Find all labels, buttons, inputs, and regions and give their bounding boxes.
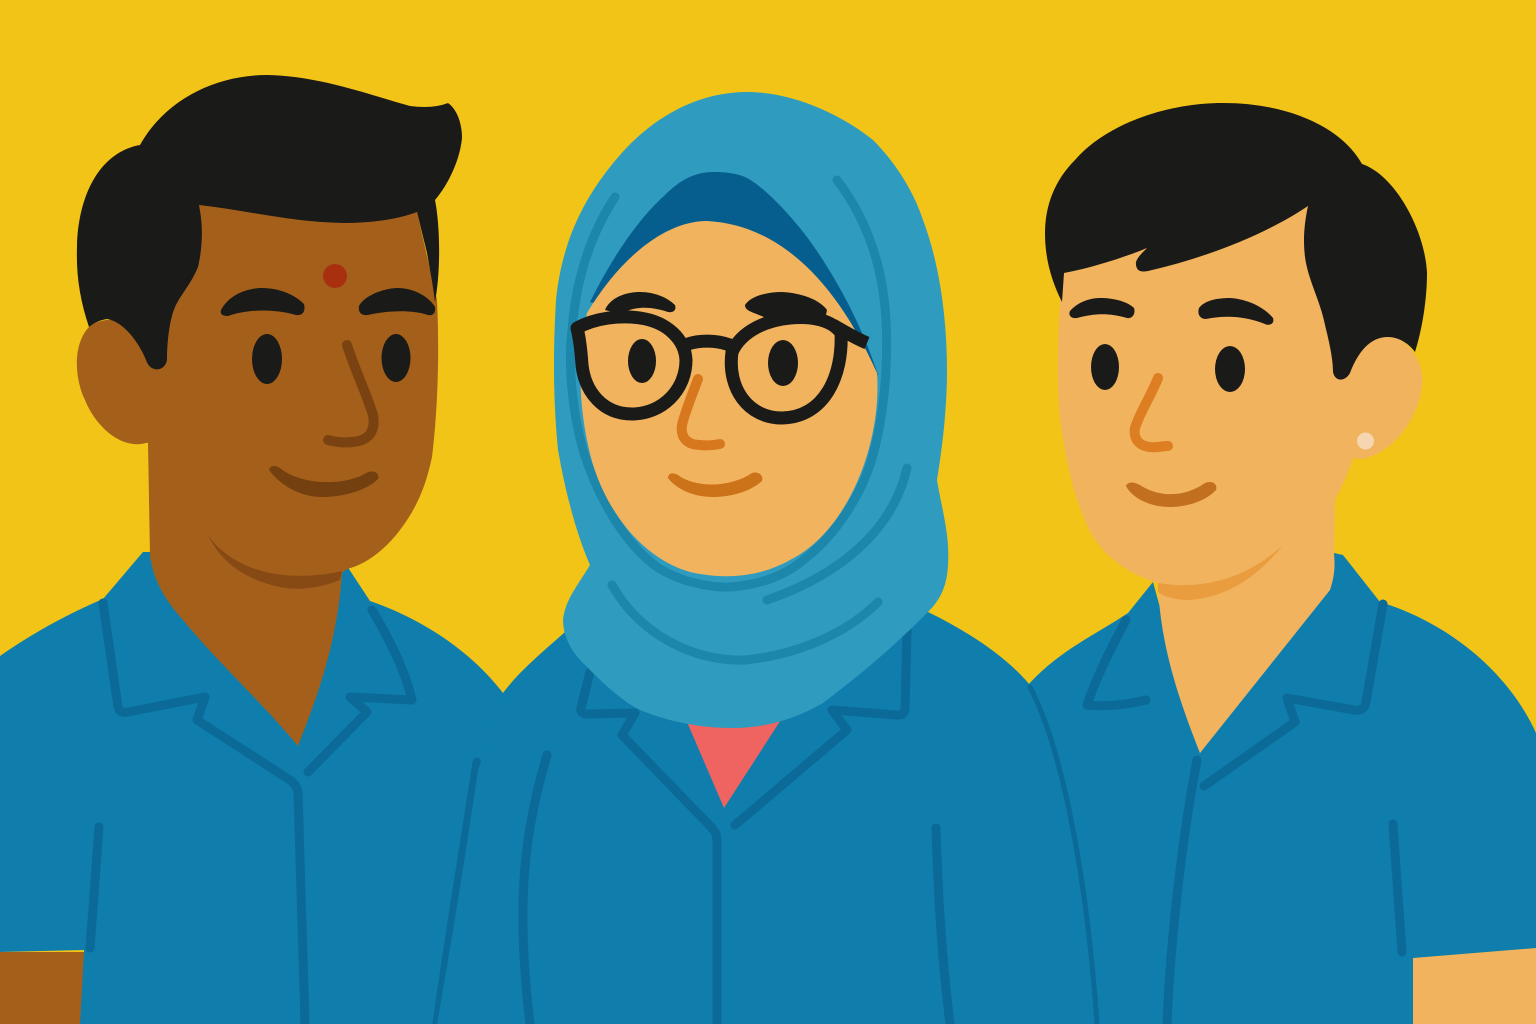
woman hijab inner band xyxy=(590,172,878,375)
woman hijab fold lines xyxy=(570,180,907,660)
woman smile xyxy=(668,472,762,497)
left man arm xyxy=(0,952,84,1024)
right man face, neck and ear xyxy=(1058,200,1422,753)
left man bindi xyxy=(323,264,347,288)
left man jaw crease xyxy=(208,535,342,589)
figure: left man xyxy=(0,75,540,1024)
woman shirt xyxy=(437,612,1097,1024)
left man eyes xyxy=(252,334,410,384)
left man shirt xyxy=(0,552,540,1024)
left man nose xyxy=(328,345,374,442)
right man hair xyxy=(1045,103,1427,380)
woman nose xyxy=(682,379,720,445)
left man ear xyxy=(77,320,170,444)
left man shirt lines xyxy=(90,603,477,1024)
woman eyebrows xyxy=(605,292,827,320)
right man nose xyxy=(1135,378,1168,447)
right man shirt xyxy=(1028,553,1536,1024)
right man smile xyxy=(1126,482,1216,507)
woman pink undershirt xyxy=(684,712,786,808)
right man eyes xyxy=(1091,344,1245,392)
right man arm xyxy=(1413,948,1536,1024)
right man shirt lines xyxy=(1087,604,1402,1024)
left man neck and face xyxy=(148,205,438,746)
woman shirt lines xyxy=(523,630,950,1024)
woman hijab xyxy=(554,92,948,728)
right man earring xyxy=(1357,432,1374,450)
woman shirt outline right xyxy=(1030,687,1097,1024)
right man jaw crease xyxy=(1158,545,1283,600)
right man eyebrows xyxy=(1069,298,1273,325)
left man eyebrows xyxy=(221,288,435,316)
woman glasses xyxy=(577,317,867,418)
figure: right man xyxy=(1028,103,1536,1024)
woman face xyxy=(580,221,878,576)
figure: center woman xyxy=(437,92,1097,1024)
left man hair xyxy=(77,75,462,369)
left man smile xyxy=(269,466,378,497)
woman eyes xyxy=(628,339,798,386)
